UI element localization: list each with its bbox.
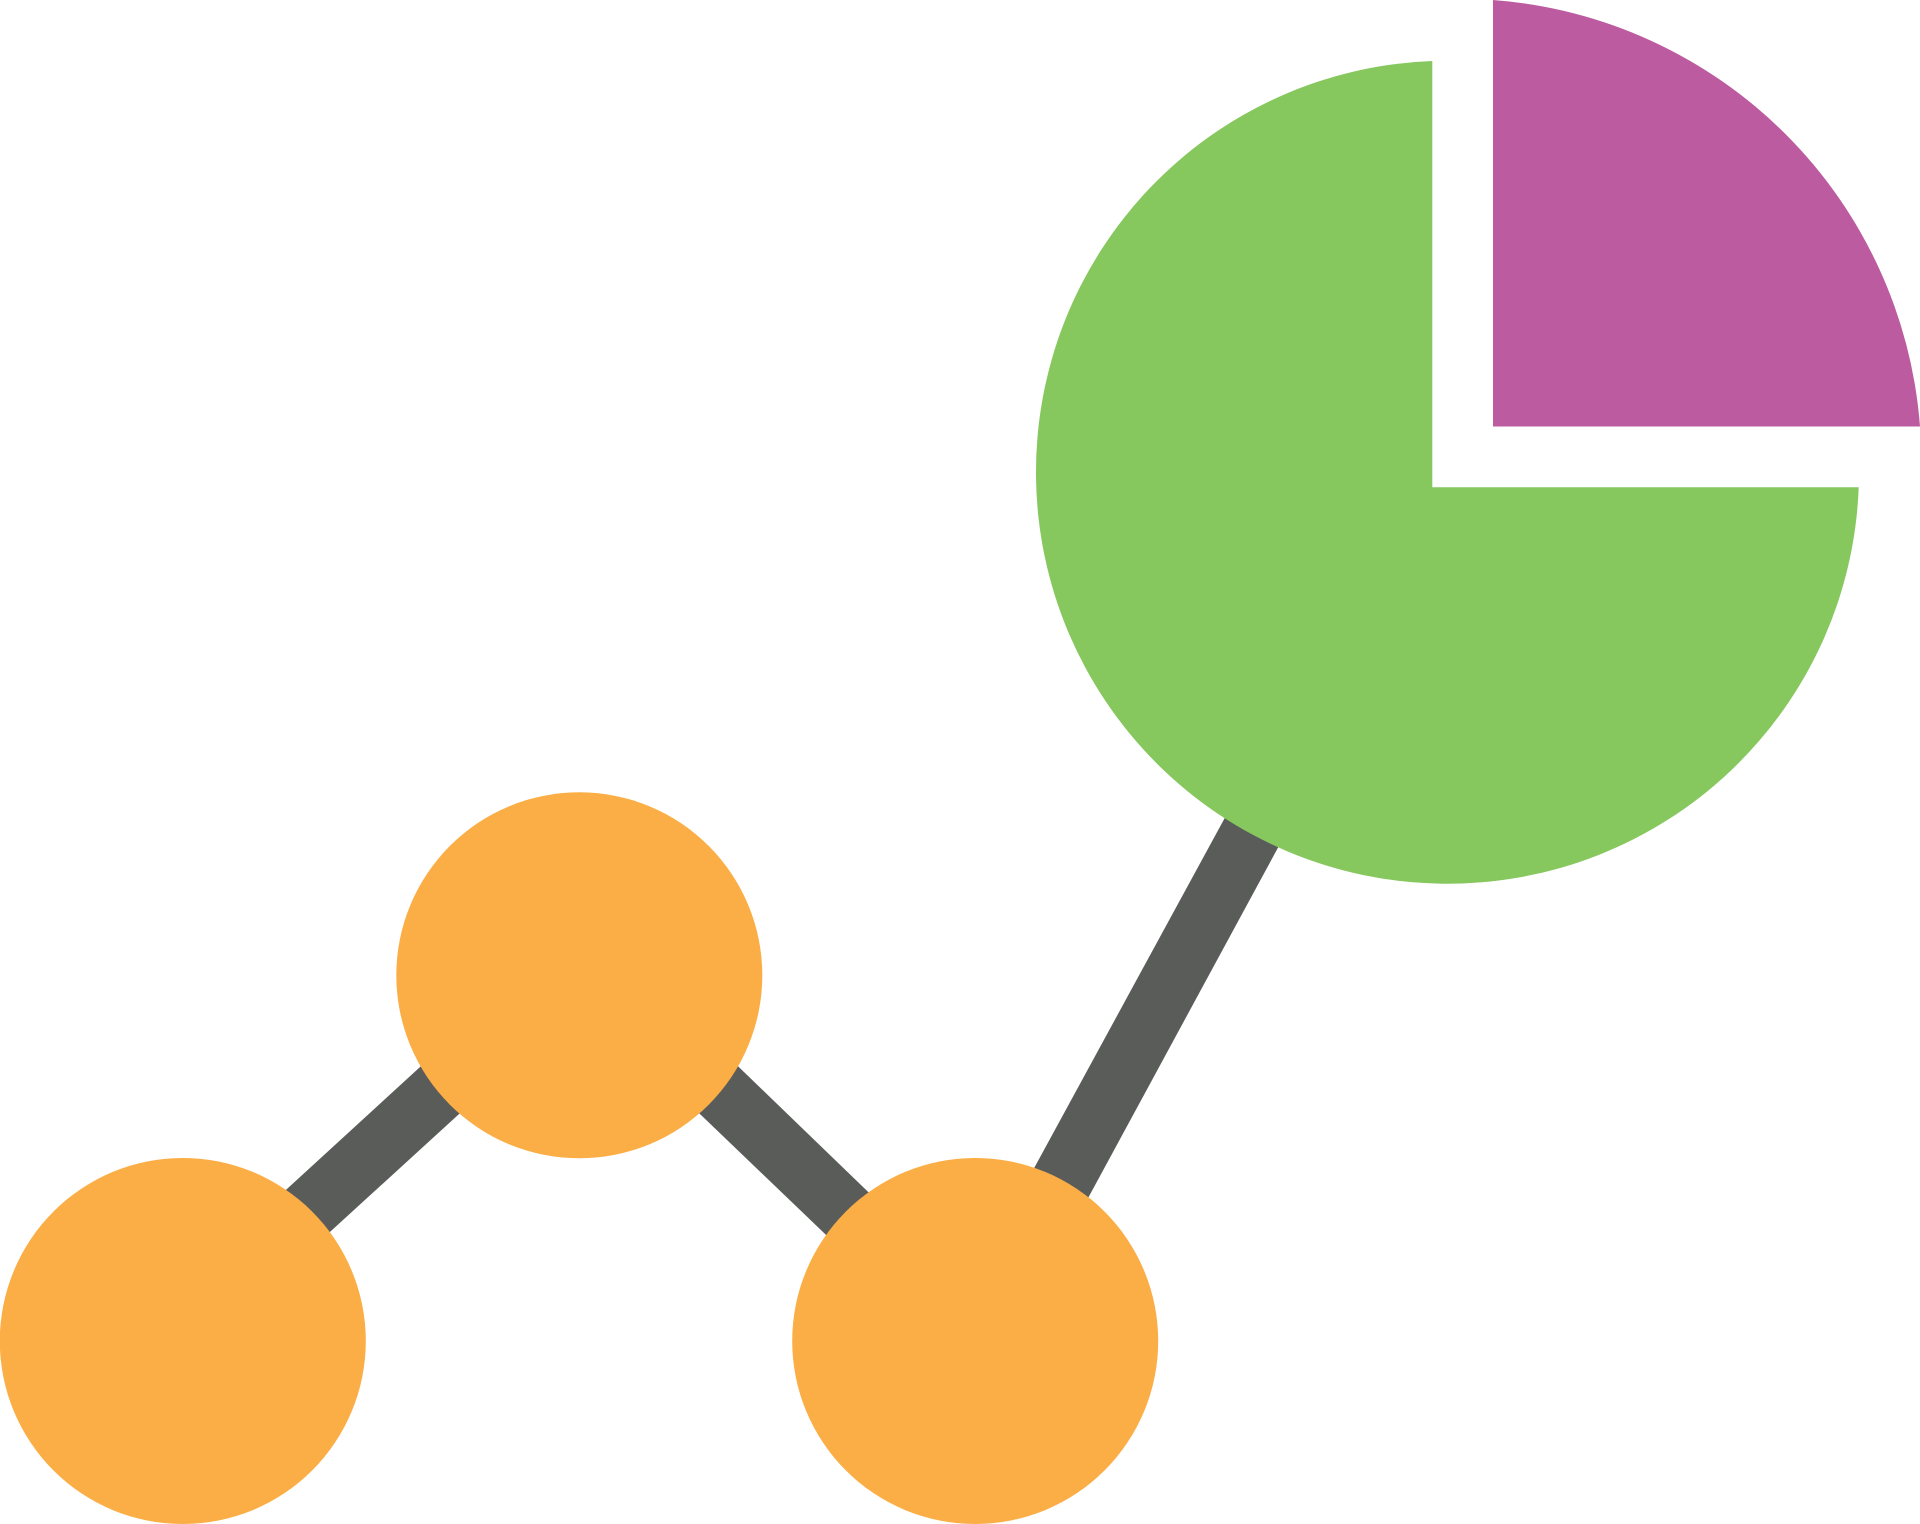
connector: top node to right node <box>677 1045 890 1256</box>
pie chart: purple quarter segment <box>1493 0 1920 426</box>
connector: left node to top node <box>264 1046 481 1252</box>
data point: top orange node <box>396 792 762 1158</box>
data point: right orange node <box>792 1158 1158 1524</box>
pie chart: large green segment <box>1036 61 1859 884</box>
data point: left orange node <box>0 1158 366 1524</box>
connector: right node to pie chart <box>1020 790 1293 1224</box>
